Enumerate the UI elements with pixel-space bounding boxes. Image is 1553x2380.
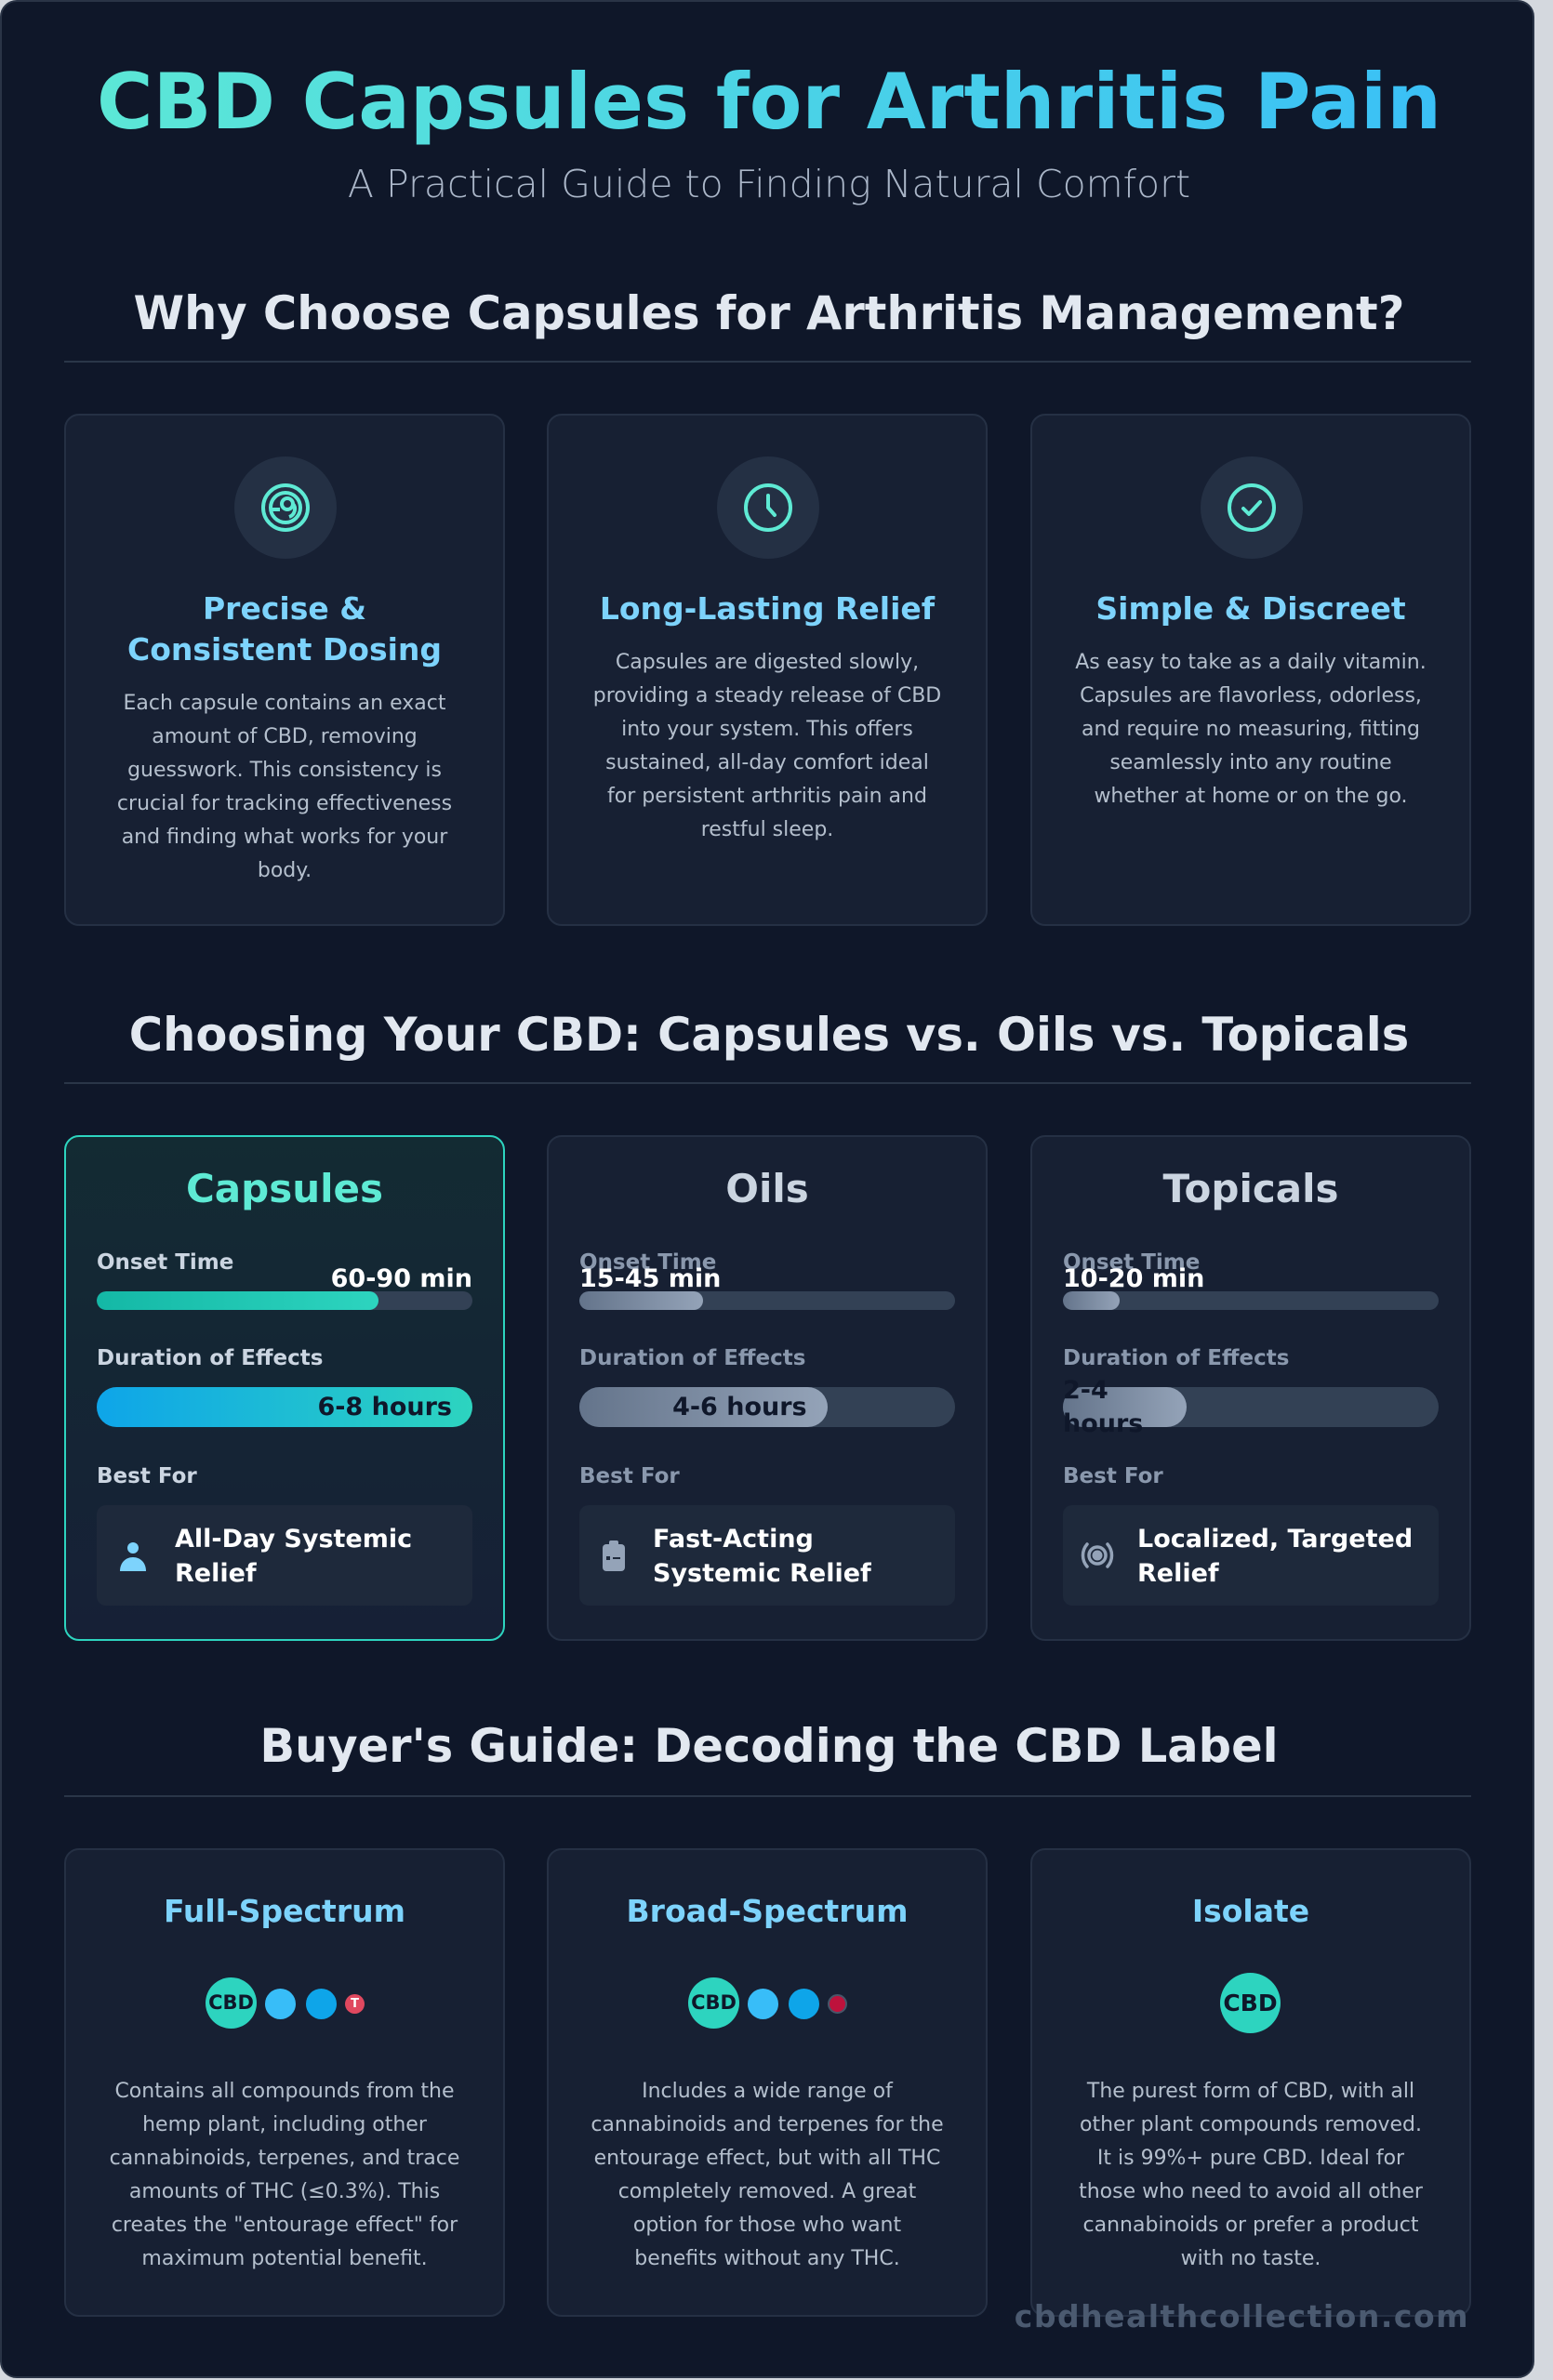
panel: capsules: Relief <box>175 1559 257 1588</box>
card title: Precise & <box>203 590 366 627</box>
icon: dosing target <box>234 456 337 559</box>
panel: capsules: All-Day Systemic <box>175 1525 412 1554</box>
panel: isolate: The purest form of CBD, with all other plant compounds removed. It is 99%+ pure CBD. Ideal for those who need to avoid all other cannabinoids or prefer a product with no taste. <box>1079 2080 1423 2270</box>
panel: full spectrum: Full-Spectrum <box>164 1893 405 1929</box>
panel: oils: 4-6 hours <box>672 1393 807 1421</box>
card title <box>127 590 442 668</box>
icon: person <box>120 1542 146 1571</box>
onset: Onset Time <box>97 1250 233 1275</box>
panel: capsules <box>64 1135 505 1641</box>
panel: topicals: 2-4 hours <box>1063 1376 1143 1437</box>
panel: oils: Systemic Relief <box>653 1559 871 1588</box>
card title: Consistent Dosing <box>127 631 442 668</box>
panel: oils: Oils <box>725 1166 809 1211</box>
panel: topicals <box>1030 1135 1471 1641</box>
watermark: cbdhealthcollection.com <box>1015 2298 1469 2334</box>
best for: Best For <box>97 1464 197 1488</box>
best for: Best For <box>579 1464 680 1488</box>
icon: broadcast <box>1081 1542 1114 1568</box>
panel: topicals: Localized, Targeted <box>1137 1525 1413 1554</box>
icon: compound dots <box>688 1977 847 2029</box>
duration: Duration of Effects <box>579 1346 805 1370</box>
icon: CBD dot <box>1220 1973 1281 2033</box>
panel: topicals: Topicals <box>1162 1166 1339 1211</box>
card text: Capsules are digested slowly, providing a steady release of CBD into your system. This offers sustained, all-day comfort ideal for persistent arthritis pain and restful sleep. <box>593 651 941 841</box>
heading: why capsules: Why Choose Capsules for Arthritis Management? <box>134 286 1404 340</box>
icon: compound dots: CBD <box>691 1991 737 2014</box>
card text: Each capsule contains an exact amount of CBD, removing guesswork. This consistency is crucial for tracking effectiveness and finding what works for your body. <box>117 692 452 882</box>
panel: isolate <box>1030 1848 1471 2317</box>
icon: compound dots: T <box>351 1997 359 2011</box>
icon: CBD dot: CBD <box>1223 1990 1278 2016</box>
card title: Simple & Discreet <box>1095 590 1406 627</box>
panel: capsules: 6-8 hours <box>317 1393 452 1421</box>
card title: Long-Lasting Relief <box>600 590 935 627</box>
icon: clock <box>717 456 819 559</box>
heading: comparison: Choosing Your CBD: Capsules vs. Oils vs. Topicals <box>129 1008 1409 1062</box>
panel: precise dosing <box>64 414 505 926</box>
heading: buyer's guide: Buyer's Guide: Decoding the CBD Label <box>259 1719 1279 1773</box>
title: Capsules <box>186 1166 383 1211</box>
icon: compound dots <box>206 1977 365 2029</box>
panel: broad spectrum: Includes a wide range of cannabinoids and terpenes for the entourage effect, but with all THC completely removed. A great option for those who want benefits without any THC. <box>591 2080 944 2270</box>
icon: compound dots: CBD <box>208 1991 254 2014</box>
onset: Onset Time <box>1063 1250 1200 1275</box>
icon: check <box>1201 456 1303 559</box>
panel: broad spectrum: Broad-Spectrum <box>627 1893 908 1929</box>
panel: long-lasting <box>547 414 988 926</box>
panel: topicals: Relief <box>1137 1559 1219 1588</box>
panel: topicals: 10-20 min <box>1063 1264 1204 1293</box>
duration: Duration of Effects <box>1063 1346 1289 1370</box>
onset: Onset Time <box>579 1250 716 1275</box>
card text: As easy to take as a daily vitamin. Capsules are flavorless, odorless, and require no measuring, fitting seamlessly into any routine whether at home or on the go. <box>1075 651 1427 808</box>
panel: full spectrum <box>64 1848 505 2317</box>
icon: clipboard <box>603 1540 625 1571</box>
duration: Duration of Effects <box>97 1346 323 1370</box>
panel: simple <box>1030 414 1471 926</box>
panel: isolate: Isolate <box>1192 1893 1309 1929</box>
panel: oils <box>547 1135 988 1641</box>
panel: broad spectrum <box>547 1848 988 2317</box>
title: CBD Capsules for Arthritis Pain <box>97 58 1441 147</box>
best for: Best For <box>1063 1464 1163 1488</box>
panel: oils: 15-45 min <box>579 1264 721 1293</box>
panel: full spectrum: Contains all compounds from the hemp plant, including other cannabinoids, terpenes, and trace amounts of THC (≤0.3%). This creates the "entourage effect" for maximum potential benefit. <box>110 2080 459 2270</box>
panel: oils: Fast-Acting <box>653 1525 814 1554</box>
subtitle: A Practical Guide to Finding Natural Comfort <box>348 162 1190 206</box>
panel: capsules: 60-90 min <box>331 1264 472 1293</box>
